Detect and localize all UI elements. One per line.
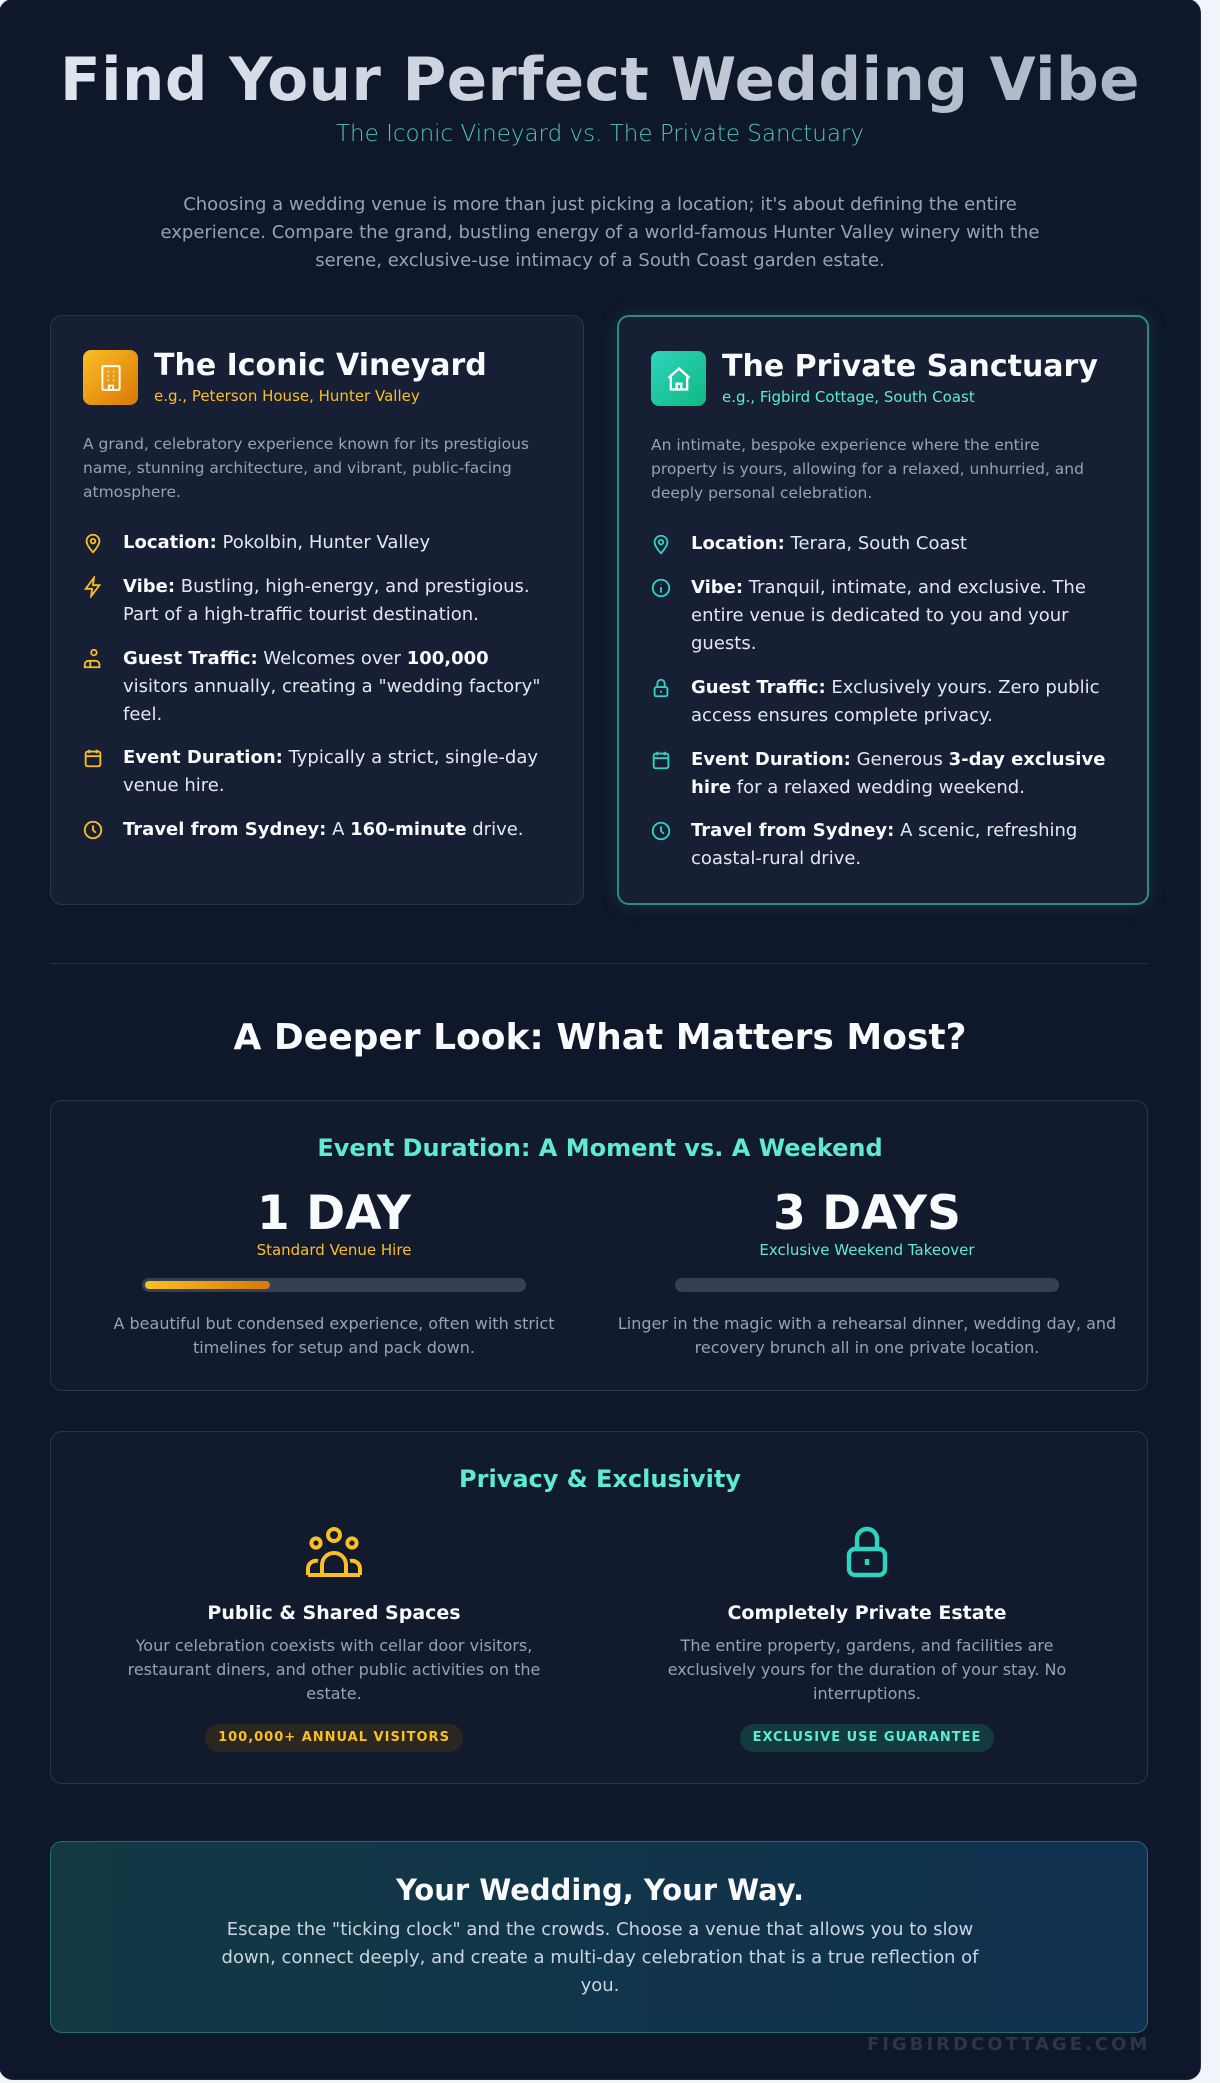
callout: your wedding your way	[50, 1841, 1148, 2033]
column: 3 days: 3 DAYS	[773, 1186, 961, 1241]
panel heading: Event Duration: A Moment vs. A Weekend	[317, 1134, 883, 1162]
callout heading: Your Wedding, Your Way.	[396, 1873, 804, 1907]
column: 1 day: A beautiful but condensed experience, often with strict timelines for setup and pack down.	[113, 1314, 554, 1357]
card description: A grand, celebratory experience known for its prestigious name, stunning architecture, and vibrant, public-facing atmosphere.	[83, 435, 529, 501]
item: vibe: Vibe: Tranquil, intimate, and exclusive. The entire venue is dedicated to you and your guests.	[691, 577, 1086, 654]
column: private estate	[668, 1526, 1066, 1752]
panel: event duration comparison	[50, 1100, 1148, 1391]
callout text: Escape the "ticking clock" and the crowds. Choose a venue that allows you to slow down, connect deeply, and create a multi-day celebration that is a true reflection of you.	[222, 1919, 978, 1996]
item: event duration: Event Duration: Generous 3-day exclusive hire for a relaxed wedding weekend.	[691, 749, 1105, 798]
badge: 100,000+ ANNUAL VISITORS	[218, 1730, 450, 1745]
column: public spaces	[128, 1527, 540, 1752]
item: event duration: Event Duration: Typically a strict, single-day venue hire.	[123, 747, 538, 796]
column: public spaces: Public & Shared Spaces	[207, 1602, 461, 1624]
subtitle: The Iconic Vineyard vs. The Private Sanctuary	[336, 121, 864, 147]
item: vibe: Vibe: Bustling, high-energy, and prestigious. Part of a high-traffic tourist destination.	[123, 576, 530, 625]
column: 1 day: Standard Venue Hire	[257, 1241, 411, 1259]
column: private estate: Completely Private Estate	[727, 1602, 1007, 1624]
icon: house	[651, 351, 706, 406]
item: travel: Travel from Sydney: A 160-minute drive.	[123, 819, 524, 840]
badge	[205, 1724, 463, 1752]
card title: The Iconic Vineyard	[154, 348, 487, 383]
card subtitle: e.g., Peterson House, Hunter Valley	[154, 387, 420, 405]
bar: 1 day	[142, 1278, 526, 1292]
column: 1 day: 1 DAY	[257, 1186, 411, 1241]
badge: EXCLUSIVE USE GUARANTEE	[753, 1730, 981, 1745]
card subtitle: e.g., Figbird Cottage, South Coast	[722, 388, 975, 406]
title: Find Your Perfect Wedding Vibe	[60, 46, 1140, 115]
bar: 3 days	[675, 1278, 1059, 1292]
panel heading: Privacy & Exclusivity	[459, 1465, 741, 1493]
card description: An intimate, bespoke experience where the entire property is yours, allowing for a relaxed, unhurried, and deeply personal celebration.	[651, 436, 1084, 502]
column: 3 days: Linger in the magic with a rehearsal dinner, wedding day, and recovery brunch all in one private location.	[618, 1314, 1116, 1357]
column: 3 days	[618, 1186, 1116, 1357]
intro paragraph: Choosing a wedding venue is more than just picking a location; it's about defining the entire experience. Compare the grand, bustling energy of a world-famous Hunter Valley winery with the serene, exclusive-use intimacy of a South Coast garden estate.	[160, 194, 1039, 271]
item: guest traffic: Guest Traffic: Welcomes over 100,000 visitors annually, creating a "wedding factory" feel.	[123, 648, 541, 725]
icon: lock	[846, 1526, 888, 1578]
column: 1 day	[113, 1186, 554, 1357]
panel: privacy & exclusivity	[50, 1431, 1148, 1784]
section heading: A Deeper Look: What Matters Most?	[234, 1017, 966, 1058]
icon: building	[83, 350, 138, 405]
panel: private sanctuary card	[617, 315, 1149, 905]
column: private estate: The entire property, gardens, and facilities are exclusively yours for the duration of your stay. No interruptions.	[668, 1636, 1066, 1703]
badge	[740, 1724, 994, 1752]
item: guest traffic: Guest Traffic: Exclusively yours. Zero public access ensures complete privacy.	[691, 677, 1099, 726]
item: travel: Travel from Sydney: A scenic, refreshing coastal-rural drive.	[691, 820, 1077, 869]
item: location: Location: Terara, South Coast	[691, 533, 967, 554]
column: public spaces: Your celebration coexists with cellar door visitors, restaurant diners, and other public activities on the estate.	[128, 1636, 540, 1703]
card title: The Private Sanctuary	[722, 349, 1098, 384]
column: 3 days: Exclusive Weekend Takeover	[759, 1241, 975, 1259]
panel: iconic vineyard card	[50, 315, 584, 905]
item: location: Location: Pokolbin, Hunter Valley	[123, 532, 430, 553]
icon: people	[306, 1527, 362, 1577]
watermark: FIGBIRDCOTTAGE.COM	[867, 2034, 1150, 2055]
